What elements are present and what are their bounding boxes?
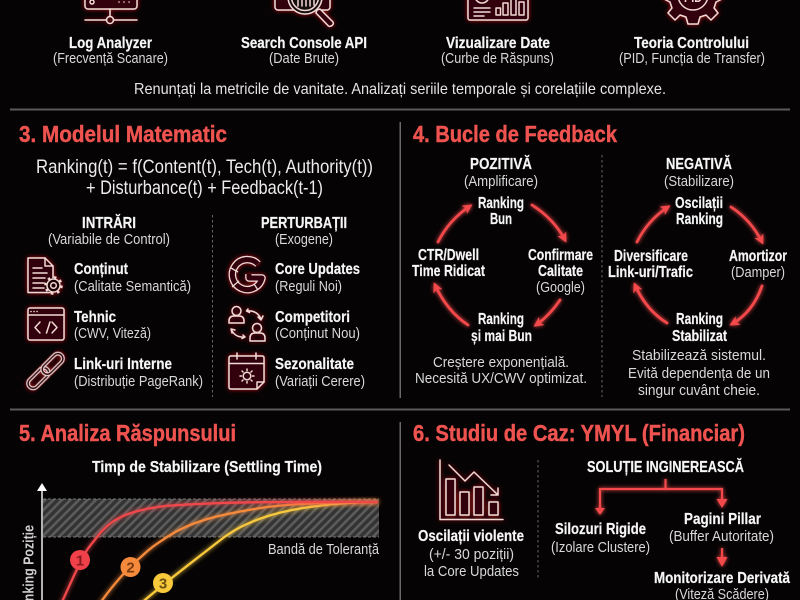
text: disturbances heading: (Exogene) [275, 231, 333, 248]
text: log analyzer [53, 35, 168, 67]
text: ranking oscillations: Ranking [676, 211, 723, 228]
text: control theory: (PID, Funcția de Transfer) [619, 50, 765, 67]
text: negative note: singur cuvânt cheie. [638, 382, 760, 399]
text: content: Conținut [74, 261, 128, 278]
icon: code window [28, 308, 64, 340]
text: core updates: (Reguli Noi) [275, 278, 342, 295]
text: competitors: Competitori [275, 309, 350, 326]
text: diversification: Diversificare [614, 248, 688, 265]
chart: settling time curves [22, 483, 380, 600]
marker 2: 2 [126, 560, 135, 576]
text: positive heading [464, 156, 538, 190]
text: violent oscillations [418, 528, 524, 580]
text: competitors: (Conținut Nou) [275, 325, 360, 342]
text: negative note: Evită dependența de un [628, 365, 770, 382]
text: ctr dwell: Time Ridicat [412, 263, 485, 280]
text: violent oscillations: Oscilații violente [418, 528, 524, 545]
heading: section 3: 3. Modelul Matematic [19, 121, 227, 147]
text: seasonality [275, 356, 365, 390]
text: data visualization [441, 35, 554, 67]
text: ranking better [471, 311, 532, 345]
text: negative heading: (Stabilizare) [664, 173, 734, 190]
y axis arrow [37, 483, 47, 600]
text: violent oscillations: la Core Updates [424, 563, 519, 580]
text: positive heading: (Amplificare) [464, 173, 538, 190]
text: internal links [74, 356, 203, 390]
icon: chain link [26, 352, 65, 390]
text: core updates: Core Updates [275, 261, 360, 278]
text: derivative monitoring [654, 570, 790, 600]
arrows: solution tree [595, 479, 728, 567]
text: violent oscillations: (+/- 30 poziții) [429, 546, 514, 563]
text: negative heading: NEGATIVĂ [666, 156, 732, 173]
text: data visualization: (Curbe de Răspuns) [441, 50, 554, 67]
marker 1 [70, 550, 90, 570]
icon: control theory gear [664, 0, 722, 24]
text: search console: Search Console API [241, 35, 367, 52]
panel: 3 mathematical model [19, 121, 373, 397]
panel: 6 case study [413, 420, 790, 600]
curve 3 [138, 502, 378, 600]
text: diversification [608, 248, 693, 281]
text: control theory [619, 35, 765, 67]
text: damper: (Damper) [731, 264, 785, 281]
marker 1: 1 [76, 552, 84, 570]
text: diversification: Link-uri/Trafic [608, 264, 693, 281]
text: technical: Tehnic [74, 309, 116, 326]
text: internal links: (Distribuție PageRank) [74, 373, 203, 390]
text: confirm quality [528, 247, 593, 296]
text: content: (Calitate Semantică) [74, 278, 191, 295]
band label: Bandă de Toleranță [268, 541, 380, 558]
text: ranking good: Bun [490, 211, 512, 228]
text: engineering solution: SOLUȚIE INGINEREASCĂ [587, 459, 744, 476]
text: content [74, 261, 191, 295]
text: formula: Ranking(t) = f(Content(t), Tech(t), Authority(t)) [36, 156, 373, 178]
text: positive note [415, 354, 587, 387]
marker 3: 3 [159, 576, 167, 592]
text: damper [729, 248, 787, 281]
text: disturbances heading [261, 215, 347, 248]
text: data visualization: Vizualizare Date [446, 35, 550, 52]
text: negative note [628, 347, 770, 399]
text: formula: + Disturbance(t) + Feedback(t-1) [86, 177, 323, 199]
text: positive note: Creștere exponențială. [433, 354, 569, 371]
icon: google G [231, 260, 262, 290]
text: chart title: Timp de Stabilizare (Settling Time) [92, 459, 322, 476]
text: negative heading [664, 156, 734, 190]
icon: log analyzer server [85, 0, 137, 24]
text: technical: (CWV, Viteză) [74, 325, 151, 342]
text: inputs heading [48, 215, 170, 248]
text: core updates [275, 261, 360, 295]
text: rigid silos [551, 521, 650, 556]
text: internal links: Link-uri Interne [74, 356, 172, 373]
text: ranking good [478, 195, 524, 228]
text: ctr dwell: CTR/Dwell [418, 247, 479, 264]
marker 3 [153, 573, 173, 593]
text: seasonality: (Variații Cerere) [275, 373, 365, 390]
curve 2 [98, 502, 378, 600]
text: control theory: Teoria Controlului [634, 35, 749, 52]
icon: seasonal calendar [229, 353, 264, 389]
text: positive heading: POZITIVĂ [470, 156, 532, 173]
heading: section 4: 4. Bucle de Feedback [413, 121, 618, 147]
text: search console [241, 35, 367, 67]
text: ctr dwell [412, 247, 485, 280]
text: negative note: Stabilizează sistemul. [632, 347, 766, 364]
text: inputs heading: (Variabile de Control) [48, 231, 170, 248]
text: rigid silos: Silozuri Rigide [555, 521, 646, 538]
text: confirm quality: Calitate [538, 263, 583, 280]
text: confirm quality: Confirmare [528, 247, 593, 264]
panel: tools row [53, 0, 765, 98]
text: ranking good: Ranking [478, 195, 524, 212]
panel: 4 feedback loops [412, 121, 787, 399]
icon: declining bar chart [440, 460, 503, 520]
heading: section 5: 5. Analiza Răspunsului [19, 420, 236, 446]
icon: document with gear [28, 258, 62, 294]
text: summary statement: Renunțați la metricile de vanitate. Analizați seriile temporale și corelațiile complexe. [134, 81, 666, 98]
text: stabilized ranking [672, 311, 727, 345]
text: inputs heading: INTRĂRI [82, 215, 136, 232]
arrows: negative loop [635, 207, 762, 324]
text: ranking better: Ranking [478, 311, 524, 328]
text: ranking better: și mai Bun [471, 328, 532, 345]
marker 2 [120, 557, 140, 577]
icon: search console magnifier [275, 0, 333, 26]
text: ranking oscillations [675, 195, 723, 228]
icon: data visualization dashboard [468, 0, 528, 20]
text: stabilized ranking: Ranking [676, 311, 723, 328]
text: search console: (Date Brute) [269, 50, 339, 67]
text: technical [74, 309, 151, 342]
text: formula [36, 156, 373, 199]
curve 1 [60, 502, 378, 600]
text: log analyzer: Log Analyzer [69, 35, 152, 52]
text: positive note: Necesită UX/CWV optimizat. [415, 370, 587, 387]
text: pillar pages: Pagini Pillar [684, 511, 761, 528]
icon: competitors swap [229, 306, 265, 341]
tolerance band [43, 499, 379, 537]
text: pillar pages [669, 511, 774, 545]
text: confirm quality: (Google) [536, 279, 585, 296]
text: ranking oscillations: Oscilații [675, 195, 723, 212]
panel: 5 response analysis [19, 420, 380, 600]
arrows: positive loop [435, 205, 565, 325]
text: rigid silos: (Izolare Clustere) [551, 539, 650, 556]
text: log analyzer: (Frecvență Scanare) [53, 50, 168, 67]
heading: section 6: 6. Studiu de Caz: YMYL (Financiar) [413, 420, 745, 446]
text: pillar pages: (Buffer Autoritate) [669, 528, 774, 545]
text: competitors [275, 309, 360, 342]
text: disturbances heading: PERTURBAȚII [261, 215, 347, 232]
text: seasonality: Sezonalitate [275, 356, 354, 373]
text: stabilized ranking: Stabilizat [672, 328, 727, 345]
